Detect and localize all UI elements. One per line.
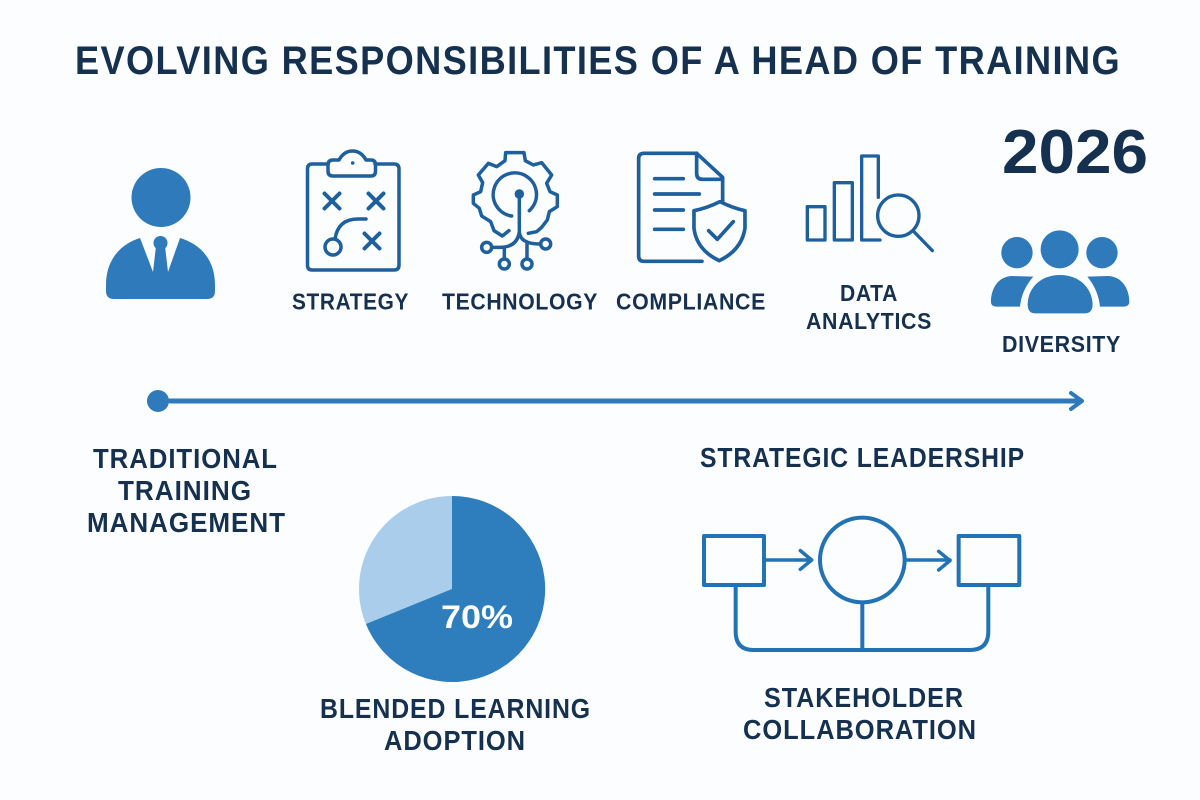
label: traditional training management: TRAINING	[118, 475, 252, 506]
label: blended learning adoption: ADOPTION	[384, 725, 526, 756]
icon: strategy clipboard	[308, 151, 399, 270]
label: traditional training management	[87, 443, 286, 538]
label: data analytics: ANALYTICS	[806, 308, 932, 334]
label: blended learning adoption	[320, 693, 591, 756]
label: data analytics: DATA	[840, 280, 898, 306]
icon: diversity group of people	[991, 230, 1129, 313]
title: EVOLVING RESPONSIBILITIES OF A HEAD OF TRAINING	[75, 39, 1121, 83]
label: data analytics	[806, 280, 932, 334]
label: technology: TECHNOLOGY	[442, 288, 598, 314]
label: stakeholder collaboration: STAKEHOLDER	[764, 682, 964, 713]
label: strategy: STRATEGY	[292, 288, 409, 314]
diagram: stakeholder collaboration flow	[704, 518, 1019, 650]
icon: technology gear	[473, 153, 557, 269]
icon: compliance document with shield	[639, 153, 745, 261]
year label: 2026: 2026	[1002, 118, 1148, 187]
label: stakeholder collaboration	[743, 682, 977, 745]
label: traditional training management: MANAGEMENT	[87, 507, 286, 538]
timeline arrow	[147, 390, 1082, 412]
label: stakeholder collaboration: COLLABORATION	[743, 714, 977, 745]
pie chart: blended learning adoption: 70%	[441, 599, 513, 635]
icon: data analytics bars and magnifier	[807, 156, 932, 251]
label: blended learning adoption: BLENDED LEARNING	[320, 693, 591, 724]
label: compliance: COMPLIANCE	[616, 288, 766, 314]
label: strategic leadership: STRATEGIC LEADERSHIP	[700, 442, 1025, 473]
icon: person in suit	[106, 168, 215, 299]
pie chart: blended learning adoption	[359, 496, 545, 682]
label: diversity: DIVERSITY	[1002, 331, 1121, 357]
label: traditional training management: TRADITIONAL	[93, 443, 278, 474]
